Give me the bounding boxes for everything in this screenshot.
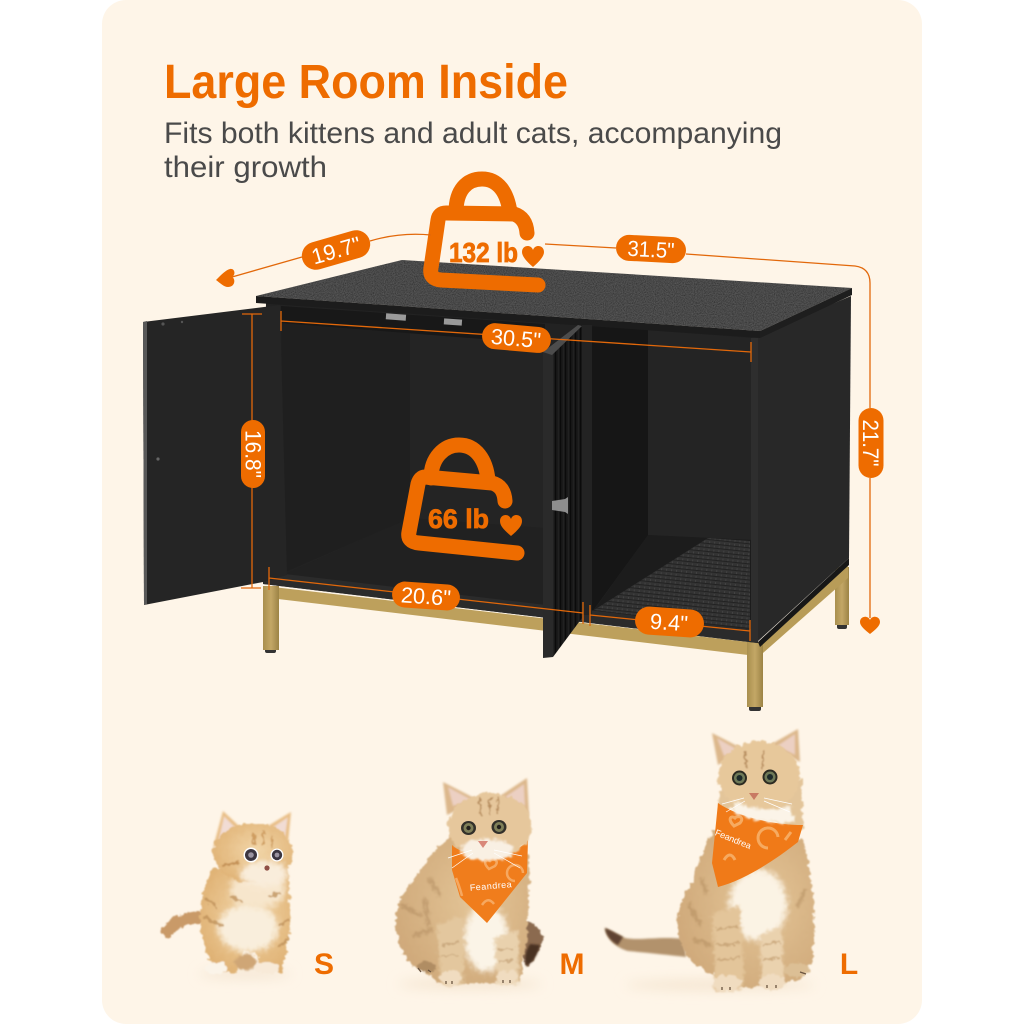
dimension: width 31.5 and height 21.7: 21.7": [858, 420, 883, 466]
heart arrow: [860, 617, 880, 634]
cat M: [395, 778, 542, 989]
cat L ears: [712, 733, 745, 765]
dimension: 20.6: [269, 567, 583, 624]
cat L: [605, 729, 815, 991]
dimension: depth 19.7: [216, 227, 431, 287]
dimension: width 31.5 and height 21.7: 31.5": [627, 236, 675, 263]
dimension: inner height 16.8: [240, 314, 266, 588]
kitten eyes and nose: [244, 848, 284, 871]
dimension: 9.4: [590, 605, 750, 641]
kitten tail: [168, 917, 200, 931]
dimension: depth 19.7: 19.7": [309, 232, 364, 269]
left compartment: [281, 306, 545, 606]
kitten head: [213, 823, 293, 887]
weight icon: 132 lb: [431, 179, 544, 285]
cat M bandana: [452, 840, 528, 923]
cat M ears: [443, 782, 478, 815]
cabinet right side: [752, 296, 851, 642]
cat L head: [718, 741, 800, 823]
cat L eyes and nose: [722, 770, 792, 812]
kitten body: [200, 868, 290, 974]
size labels: L: [840, 948, 858, 981]
cat L tail: [605, 928, 686, 957]
weight icon: 66 lb: 66 lb: [428, 504, 489, 534]
cat L body and legs: [678, 830, 814, 991]
cat L bandana: [712, 803, 803, 887]
weight icon: 66 lb: [409, 445, 522, 553]
subtitle: Fits both kittens and adult cats, accompanying: [164, 117, 782, 150]
subtitle: their growth: [164, 151, 327, 184]
right compartment with litter mat: [592, 326, 752, 632]
dimension: 9.4: 9.4": [649, 609, 689, 636]
dimension: width 31.5 and height 21.7: [545, 234, 884, 634]
kitten S: [168, 811, 293, 978]
cat M toes: [418, 968, 510, 984]
weight icon: 132 lb: 132 lb: [449, 237, 518, 268]
dimension: 20.6: 20.6": [400, 582, 452, 611]
open fluted door: [543, 325, 582, 658]
cat M body and legs: [395, 833, 530, 985]
cat L bandana: Feandrea: [714, 827, 753, 851]
center divider: [582, 325, 592, 615]
cabinet top: [256, 260, 852, 338]
heart arrow: [216, 269, 234, 287]
gold legs and rails: [263, 566, 849, 711]
title: Large Room Inside: [164, 56, 568, 109]
cat M head: [448, 793, 532, 861]
cat M tail: [521, 920, 542, 966]
dimension: inner height 16.8: 16.8": [240, 430, 266, 478]
cat L neck: [718, 780, 803, 830]
kitten ears: [213, 811, 241, 848]
cat L toes: [722, 972, 806, 990]
size labels: [314, 948, 858, 981]
dimension: inner width 30.5: 30.5": [490, 324, 542, 353]
cabinet body front: [263, 303, 758, 643]
cabinet: [143, 260, 852, 711]
cabinet base strip: [263, 572, 757, 643]
subtitle: [164, 117, 782, 184]
size labels: S: [314, 948, 334, 981]
open left door: [143, 305, 287, 605]
dimension: inner width 30.5: [281, 311, 751, 362]
cat M eyes and nose: [448, 820, 522, 868]
cat M bandana: Feandrea: [469, 879, 512, 893]
size labels: M: [560, 948, 584, 981]
